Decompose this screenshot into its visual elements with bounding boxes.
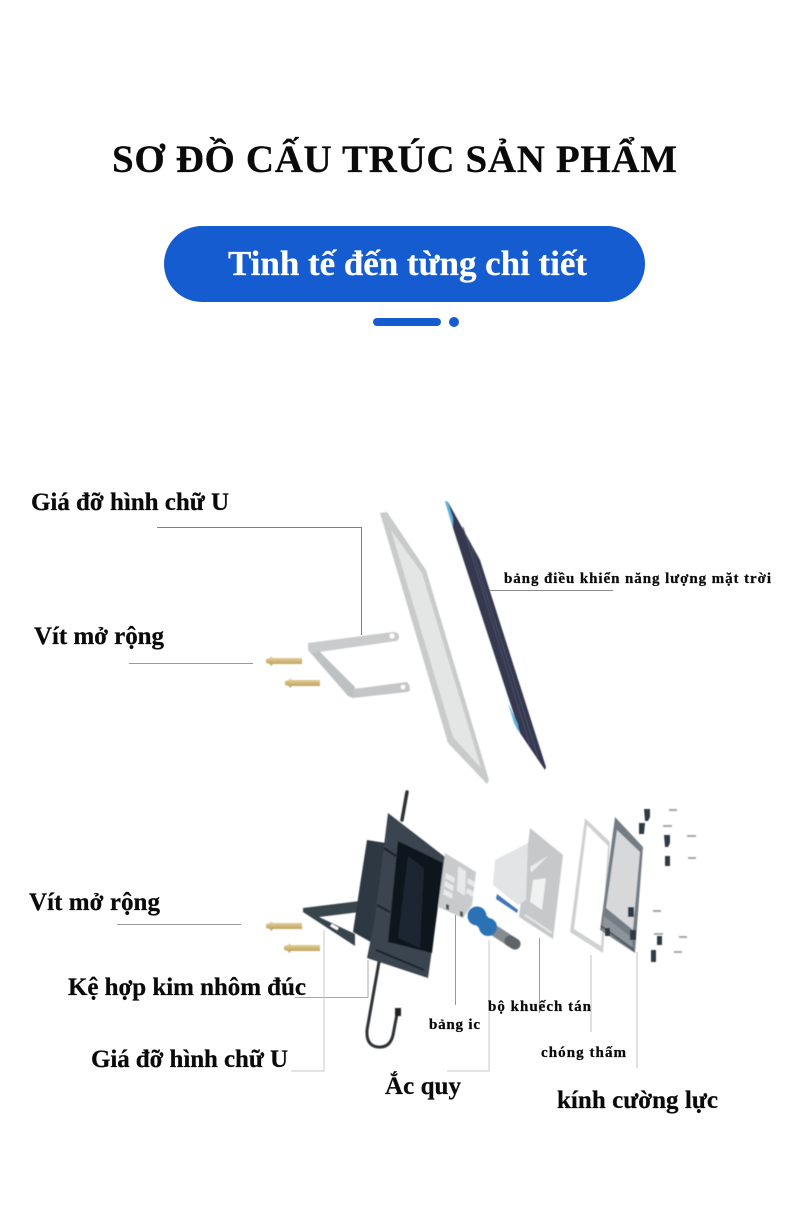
back frame panel xyxy=(380,512,489,784)
leader lines xyxy=(117,528,637,1071)
label: IC board: bảng ic xyxy=(429,1017,480,1033)
label: U bracket bottom: Giá đỡ hình chữ U xyxy=(91,1046,288,1073)
label: tempered glass: kính cường lực xyxy=(557,1087,718,1114)
icon: battery xyxy=(468,906,515,944)
subtitle pill: Tinh tế đến từng chi tiết xyxy=(228,244,587,283)
label: solar panel: bảng điều khiển năng lượng mặt trời xyxy=(504,571,771,587)
icon: tempered glass xyxy=(600,817,643,953)
power cable xyxy=(367,792,407,1047)
label: battery: Ắc quy xyxy=(385,1071,462,1100)
icon: U bracket xyxy=(308,632,410,698)
icon: clips and screws xyxy=(639,809,696,962)
exploded diagram: rear assembly xyxy=(266,501,546,784)
subtitle pill xyxy=(164,226,645,302)
icon: expansion screws upper xyxy=(266,656,320,688)
icon: IC board xyxy=(438,853,476,918)
icon: diffuser xyxy=(493,828,563,939)
icon: expansion screws lower xyxy=(266,921,320,953)
label: expansion screw top: Vít mở rộng xyxy=(34,623,164,650)
pill underline decoration xyxy=(373,317,459,327)
icon: die-cast aluminium housing xyxy=(303,813,445,978)
label: U bracket top: Giá đỡ hình chữ U xyxy=(31,489,229,516)
label: waterproof gasket: chóng thấm xyxy=(541,1045,626,1061)
icon: waterproof gasket xyxy=(570,818,610,953)
exploded diagram: front assembly xyxy=(266,792,696,1047)
label: expansion screw bottom: Vít mở rộng xyxy=(29,889,160,916)
title: SƠ ĐỒ CẤU TRÚC SẢN PHẨM xyxy=(112,135,677,181)
label: diffuser: bộ khuếch tán xyxy=(488,999,592,1015)
solar panel xyxy=(445,501,546,770)
label: die-cast aluminium housing: Kệ hợp kim nhôm đúc xyxy=(68,974,306,1001)
